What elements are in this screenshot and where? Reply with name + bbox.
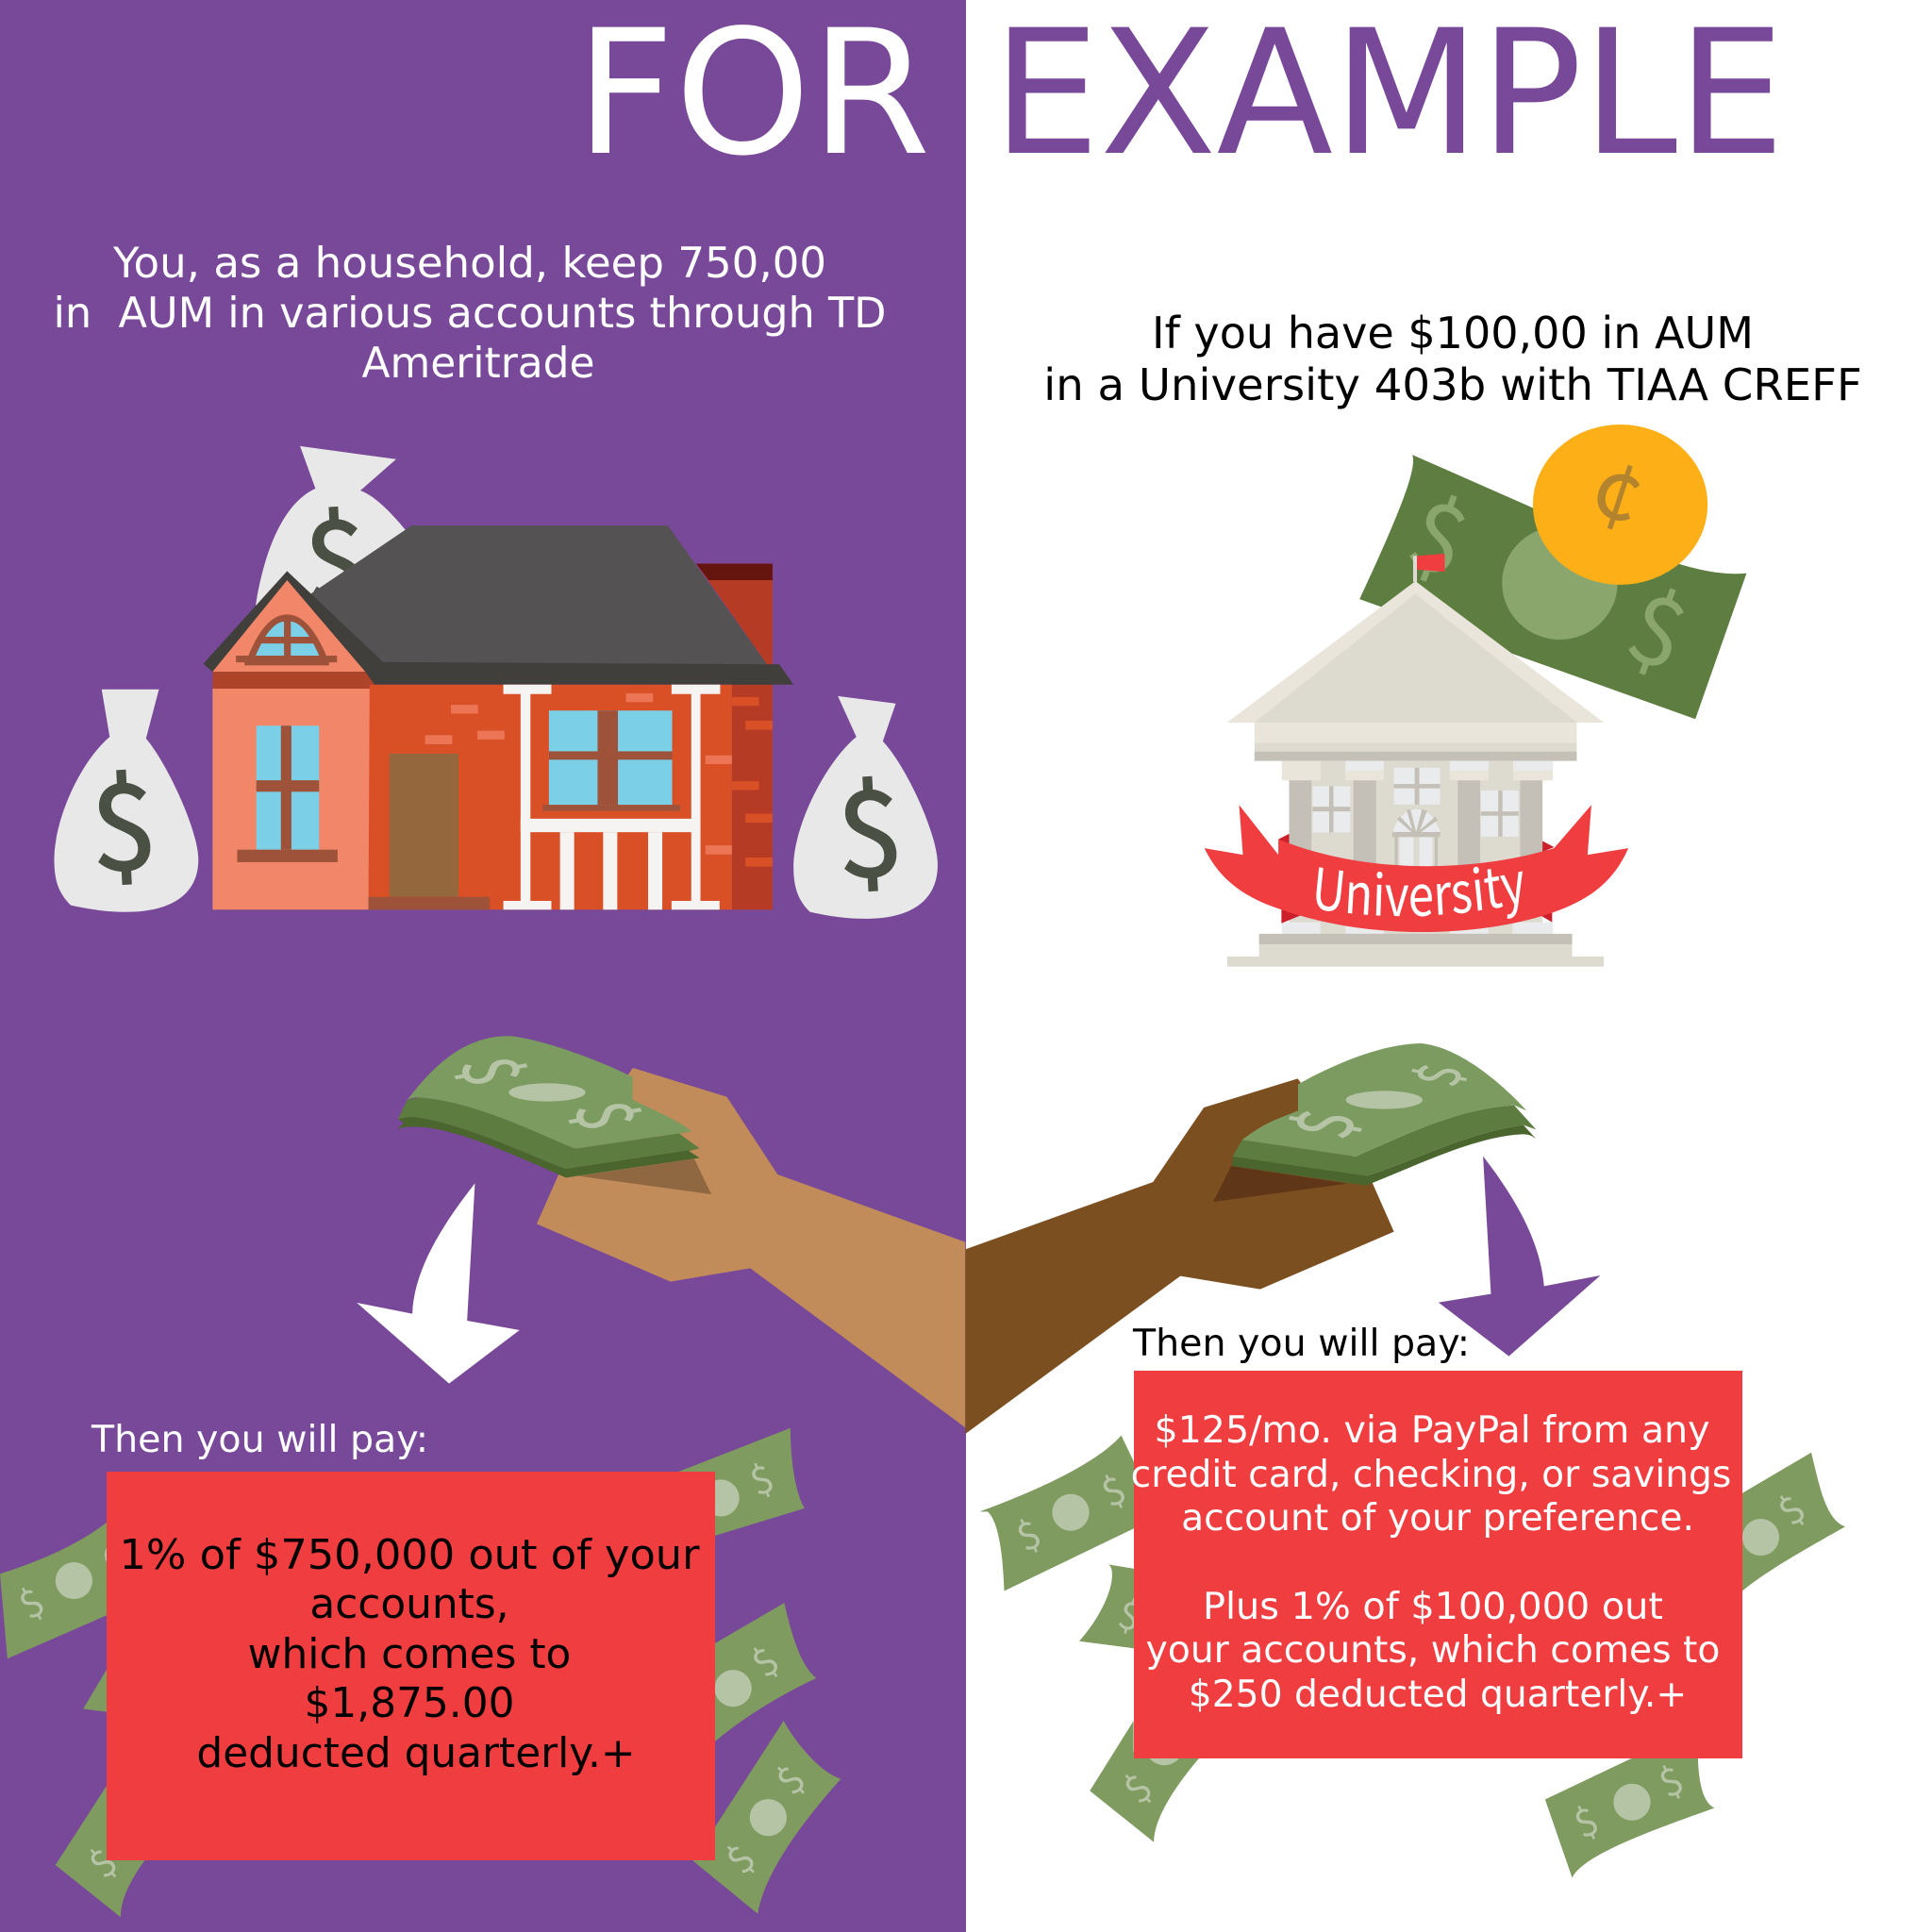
icon: university ribbon banner: University	[1316, 866, 1523, 919]
panel: purple left background	[0, 0, 966, 1932]
icon: left money bag	[54, 690, 198, 912]
icon: falling bills left: $	[762, 1752, 816, 1806]
icon: dollar bill behind university	[1359, 455, 1746, 719]
callout: left red fee box: $1,875.00	[305, 1679, 514, 1727]
icon: right cash stack	[1213, 1043, 1536, 1202]
icon: left hand	[537, 1068, 965, 1427]
icon: back money bag	[256, 446, 407, 637]
callout: right red fee box: your accounts, which comes to	[1146, 1629, 1720, 1672]
icon: house	[204, 525, 793, 909]
icon: falling bills left: $	[739, 1632, 789, 1689]
callout: right red fee box	[1131, 1371, 1742, 1758]
icon: falling bills left: $	[712, 1831, 766, 1885]
text block: left household intro: Ameritrade	[362, 339, 594, 388]
callout: left red fee box	[107, 1472, 715, 1860]
icon: falling bills right: $	[1649, 1751, 1691, 1808]
icon: left money bag: $	[86, 731, 160, 905]
icon: back money bag: $	[300, 470, 371, 637]
illustration: house with money bags	[54, 446, 938, 919]
icon: right money bag	[793, 696, 938, 919]
title	[575, 0, 1785, 194]
icon: falling bills right: $	[1765, 1480, 1815, 1537]
icon: dollar bill behind university: $	[1611, 551, 1707, 698]
label: right then you will pay: Then you will pay:	[1132, 1322, 1470, 1365]
callout: right red fee box: credit card, checking, or savings	[1131, 1454, 1731, 1496]
label: left then you will pay: Then you will pay:	[91, 1418, 428, 1461]
arrow: white down arrow	[357, 1183, 520, 1384]
text block: right university intro	[1043, 308, 1862, 410]
icon: gold coin	[1533, 422, 1707, 585]
icon: falling bills right: $	[1110, 1759, 1162, 1814]
icon: left cash stack	[398, 1036, 711, 1194]
arrow: purple down arrow	[1439, 1157, 1600, 1357]
illustration: left hand holding cash: $	[438, 1049, 555, 1092]
icon: falling bills right	[979, 1436, 1845, 1878]
icon: falling bills right: $	[1564, 1791, 1607, 1849]
callout: left red fee box: accounts,	[309, 1580, 509, 1628]
text block: right university intro: in a University 403b with TIAA CREFF	[1043, 359, 1862, 410]
icon: falling bills left: $	[8, 1573, 53, 1630]
callout: right red fee box: $250 deducted quarterly.+	[1189, 1674, 1687, 1716]
icon: falling bills left	[0, 1428, 841, 1917]
callout: left red fee box: 1% of $750,000 out of your	[119, 1531, 700, 1579]
callout: right red fee box: $125/mo. via PayPal from any	[1155, 1409, 1709, 1452]
icon: right money bag: $	[832, 738, 907, 911]
illustration: university with bill and coin	[1204, 422, 1747, 967]
text block: left household intro	[53, 239, 887, 388]
callout: left red fee box: deducted quarterly.+	[196, 1729, 636, 1777]
icon: right hand	[965, 1078, 1394, 1434]
illustration: right hand holding cash: $	[1262, 1101, 1378, 1145]
icon: dollar bill behind university: $	[1392, 458, 1489, 605]
illustration: left hand holding cash: $	[552, 1093, 669, 1137]
icon: university building	[1226, 554, 1604, 967]
callout: left red fee box: which comes to	[248, 1630, 571, 1678]
icon: falling bills right: $	[1007, 1505, 1049, 1562]
callout: right red fee box: Plus 1% of $100,000 out	[1203, 1586, 1663, 1628]
icon: falling bills right: $	[1113, 1584, 1147, 1642]
icon: university ribbon banner	[1204, 805, 1628, 932]
illustration: right hand holding cash	[965, 1043, 1536, 1434]
illustration: right hand holding cash: $	[1391, 1058, 1479, 1091]
icon: gold coin: ¢	[1576, 422, 1661, 557]
icon: falling bills right: $	[1091, 1460, 1134, 1518]
text block: left household intro: You, as a household, keep 750,00	[112, 239, 826, 288]
icon: falling bills left: $	[75, 1834, 127, 1889]
icon: falling bills left: $	[741, 1448, 781, 1507]
text block: right university intro: If you have $100,00 in AUM	[1152, 308, 1754, 358]
text block: left household intro: in AUM in various accounts through TD	[53, 289, 887, 338]
illustration: left hand holding cash	[398, 1036, 965, 1427]
callout: right red fee box: account of your preference.	[1181, 1497, 1694, 1540]
